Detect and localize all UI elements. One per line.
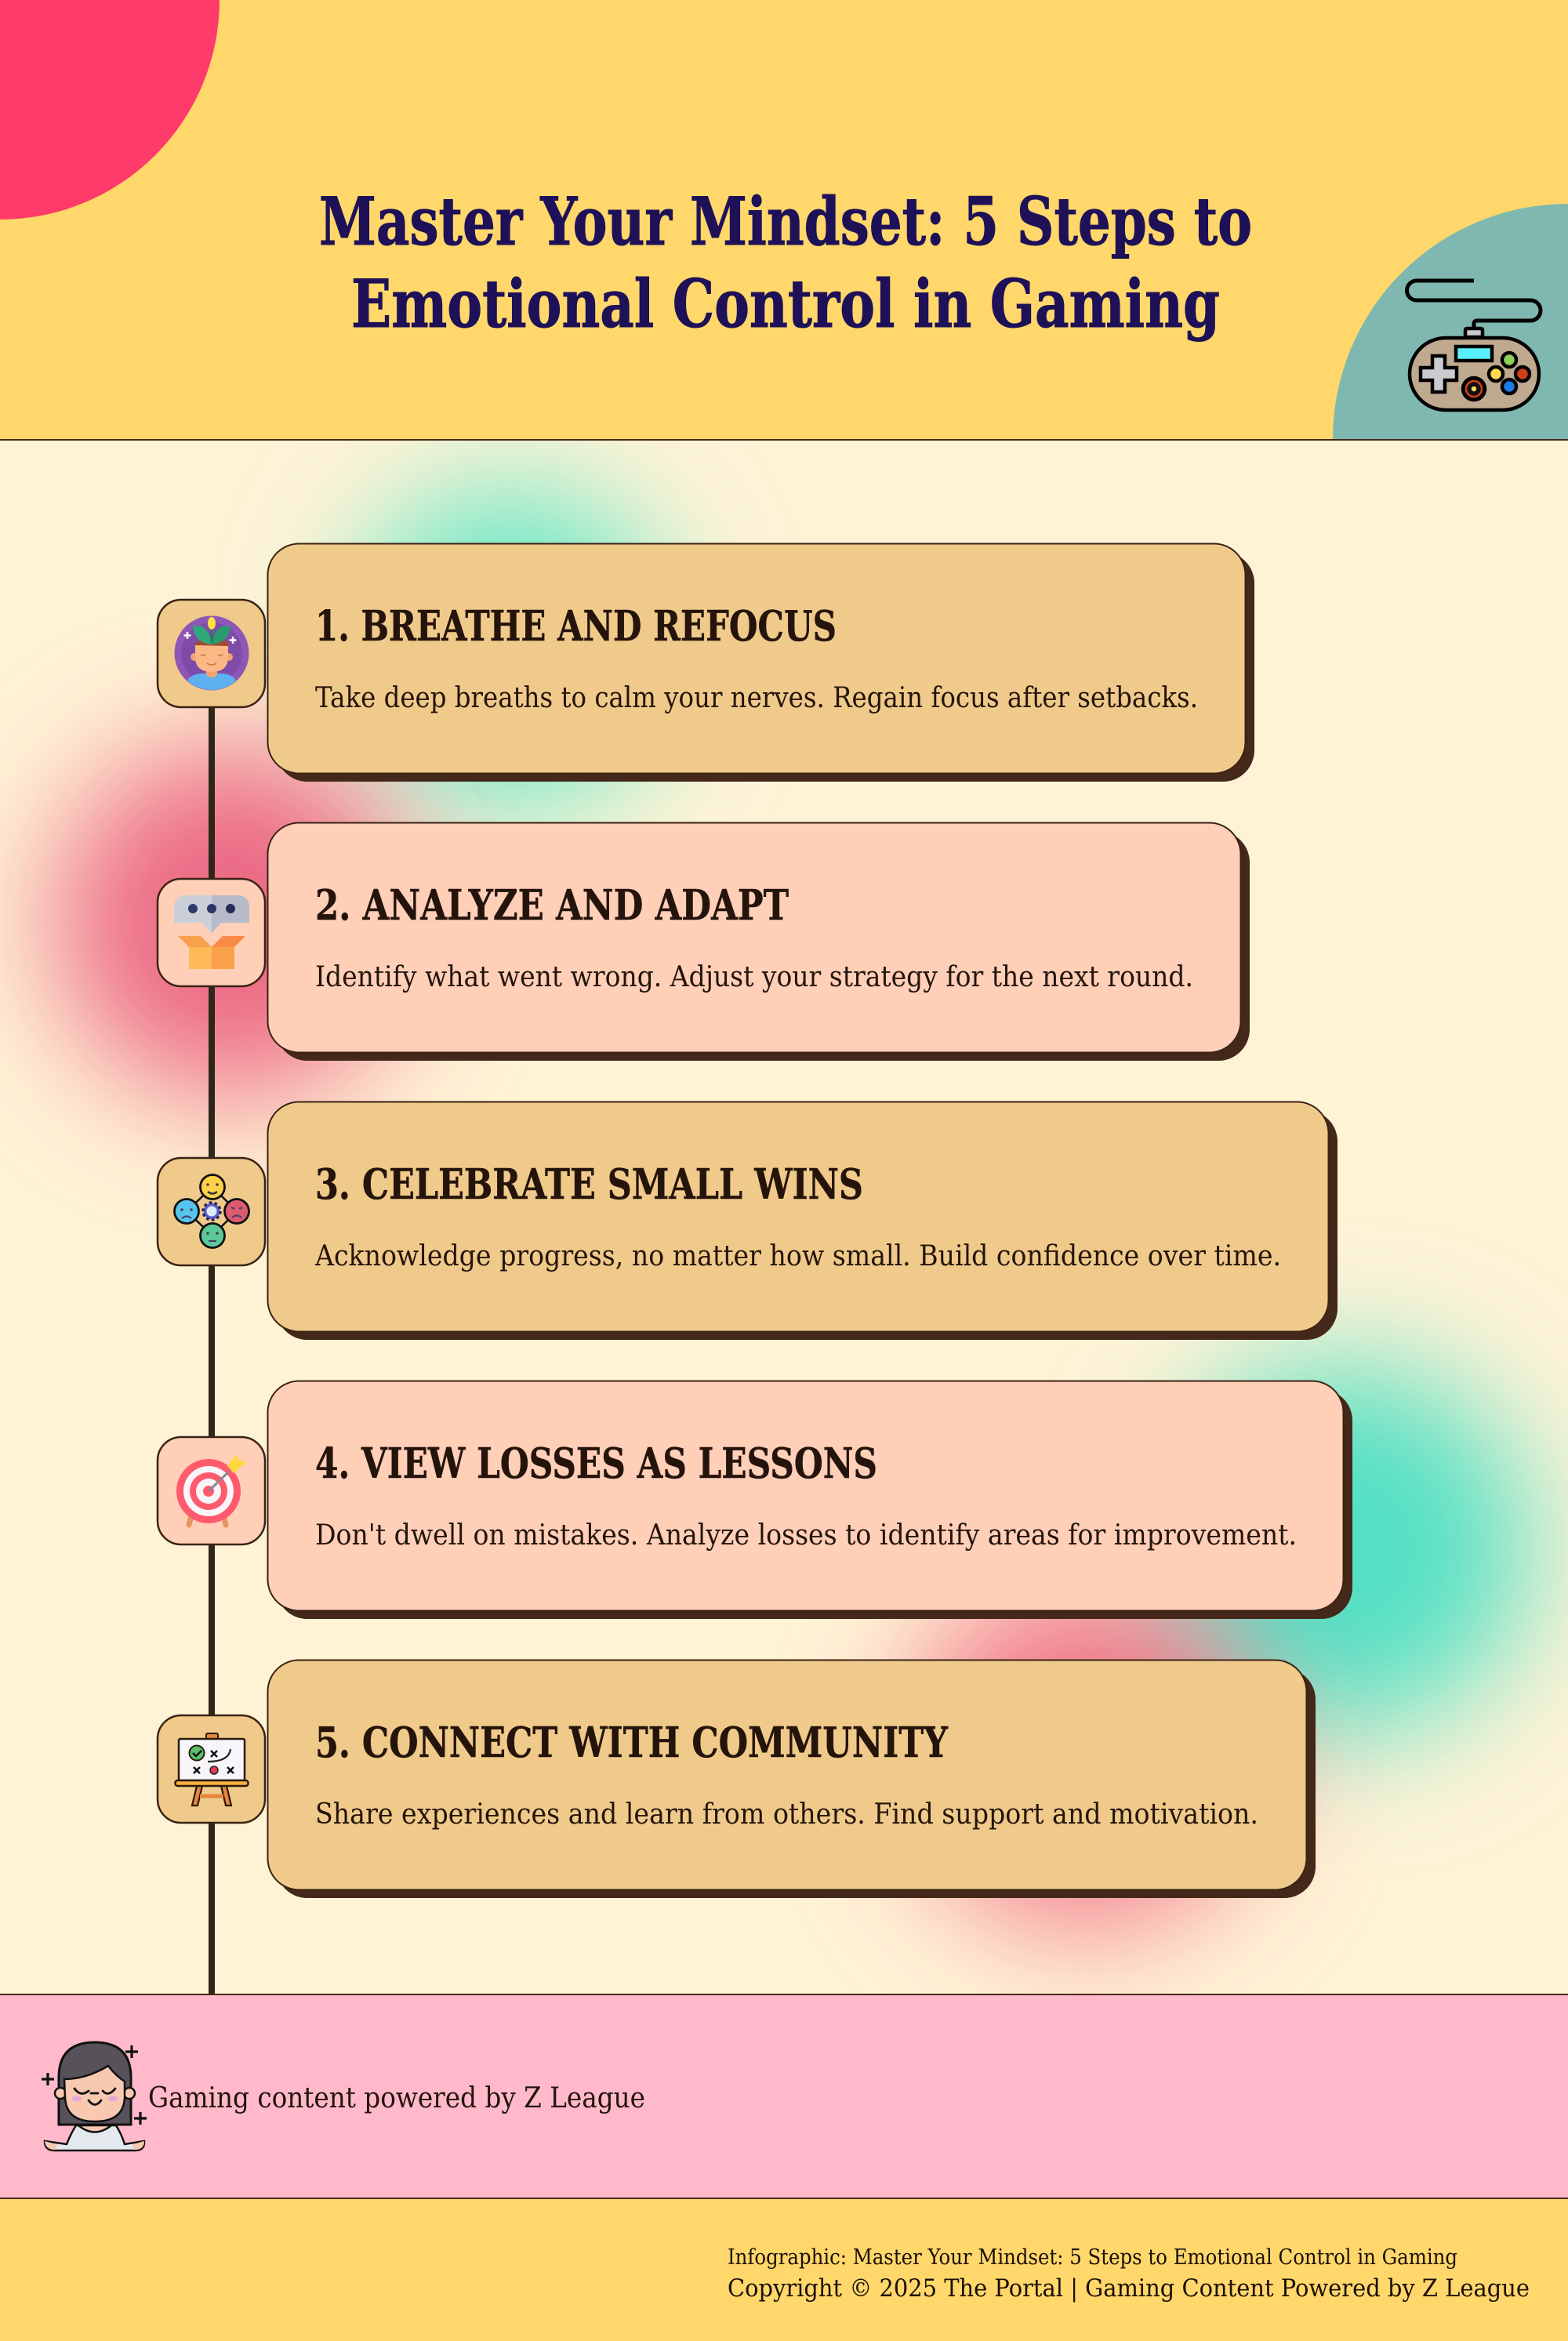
title: [319, 183, 1252, 343]
title: Emotional Control in Gaming: [351, 265, 1220, 343]
step 2 description: Identify what went wrong. Adjust your strategy for the next round.: [315, 961, 1193, 993]
panel: header: [0, 0, 1568, 441]
panel: main background: [0, 439, 1568, 1995]
step 3 heading: 3. CELEBRATE SMALL WINS: [315, 1160, 863, 1209]
panel: footer pink band: [0, 1994, 1568, 2199]
icon: target with arrow: [158, 1437, 265, 1544]
step 4 heading: 4. VIEW LOSSES AS LESSONS: [315, 1439, 877, 1488]
copyright line: Copyright © 2025 The Portal | Gaming Content Powered by Z League: [728, 2274, 1530, 2303]
panel: bottom yellow footer: [0, 2199, 1568, 2341]
icon: game controller: [1406, 281, 1541, 410]
step 5 heading: 5. CONNECT WITH COMMUNITY: [315, 1719, 949, 1767]
icon: strategy board on easel: [158, 1715, 265, 1823]
step 4 description: Don't dwell on mistakes. Analyze losses to identify areas for improvement.: [315, 1519, 1297, 1552]
footer text: Gaming content powered by Z League: [148, 2082, 645, 2114]
step 3 description: Acknowledge progress, no matter how small. Build confidence over time.: [314, 1240, 1281, 1272]
infographic caption: Infographic: Master Your Mindset: 5 Steps to Emotional Control in Gaming: [728, 2245, 1457, 2270]
icon: emotion faces around gear: [158, 1158, 265, 1265]
icon: mindful head with plant: [158, 600, 265, 707]
step 2 card: [268, 823, 1250, 1061]
decorative pink quarter circle: [0, 0, 220, 220]
decorative teal quarter circle: [1333, 204, 1568, 439]
step 2 heading: 2. ANALYZE AND ADAPT: [315, 881, 789, 930]
title: Master Your Mindset: 5 Steps to: [319, 183, 1252, 260]
step 5 description: Share experiences and learn from others. Find support and motivation.: [315, 1798, 1258, 1831]
icon: speech bubble over open box: [158, 879, 265, 986]
step 4 card: [268, 1381, 1352, 1619]
step 1 heading: 1. BREATHE AND REFOCUS: [315, 602, 837, 651]
step 3 card: [268, 1102, 1338, 1340]
step 1 description: Take deep breaths to calm your nerves. Regain focus after setbacks.: [315, 682, 1198, 714]
step 5 card: [268, 1660, 1316, 1898]
timeline line: [209, 698, 215, 1994]
icon: meditating girl: [42, 2042, 147, 2150]
step 1 card: [268, 544, 1254, 782]
